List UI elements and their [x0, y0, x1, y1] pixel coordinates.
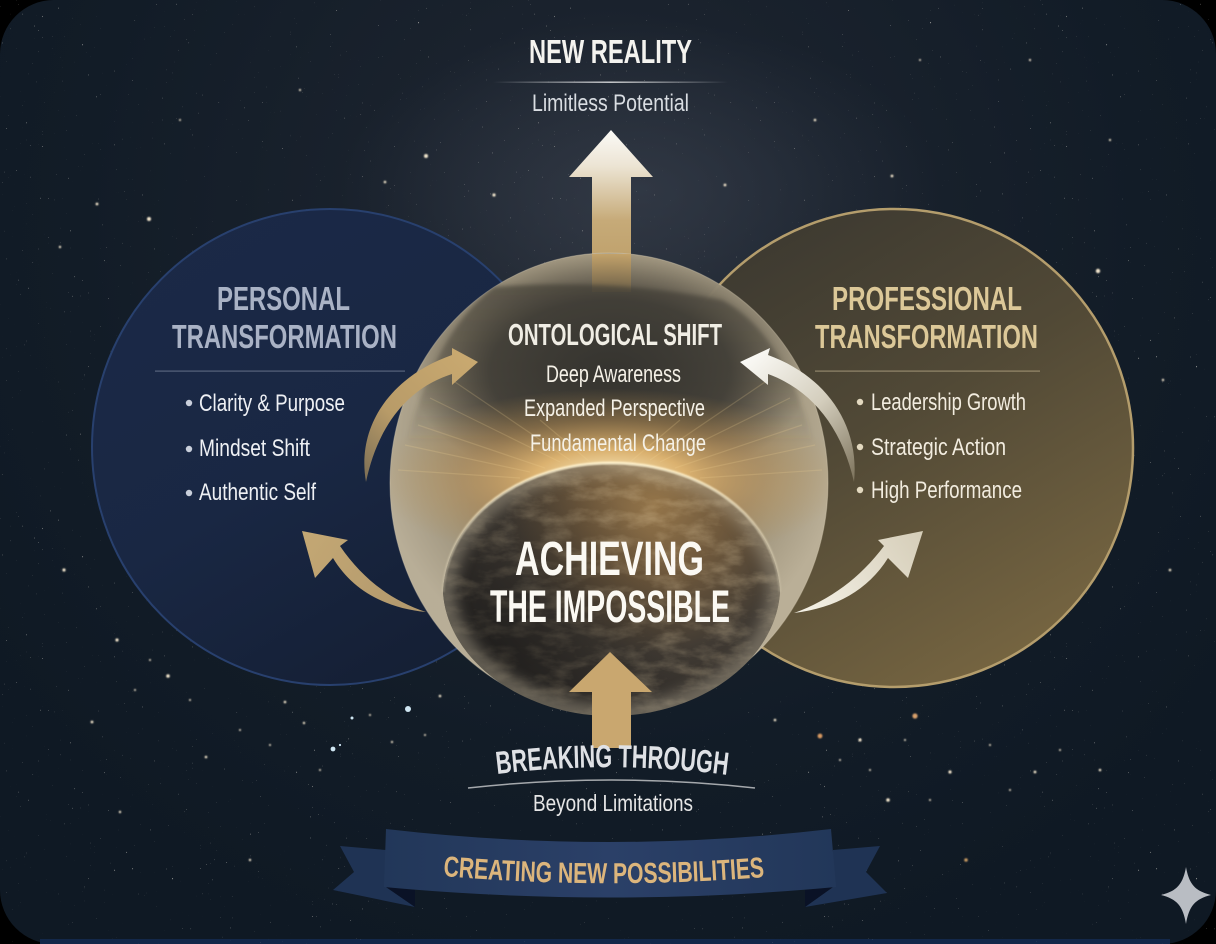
- banner: creating new possibilities: CREATING NEW POSSIBILITIES: [444, 856, 764, 884]
- title: achieving the impossible: [490, 533, 730, 632]
- panel: professional transformation circle: [655, 209, 1133, 687]
- sphere inner shading and glow: [398, 256, 822, 528]
- heading: personal transformation: TRANSFORMATION: [172, 318, 397, 355]
- icon: sparkle watermark: [1161, 867, 1211, 924]
- list: personal bullet points: [186, 390, 345, 506]
- list: professional bullet points: [857, 389, 1026, 504]
- heading: breaking through: BREAKING THROUGH: [496, 744, 729, 775]
- circle: professional: [655, 209, 1133, 687]
- heading: breaking through: [468, 744, 756, 816]
- list: professional bullet points: Leadership Growth: [871, 389, 1026, 416]
- circle: personal: [92, 209, 568, 685]
- list: professional bullet points: High Performance: [871, 477, 1022, 504]
- title: ontological shift: ONTOLOGICAL SHIFT: [508, 317, 722, 352]
- list: ontological shift points: Fundamental Change: [530, 430, 706, 457]
- list: personal bullet points: Authentic Self: [199, 479, 316, 506]
- heading: personal transformation: [172, 280, 397, 355]
- list: professional bullet points: Strategic Action: [871, 434, 1006, 461]
- arrow: new reality upward: [569, 130, 653, 294]
- list: personal bullet points: Mindset Shift: [199, 435, 310, 462]
- heading: professional transformation: TRANSFORMATION: [815, 318, 1038, 355]
- title: achieving the impossible: THE IMPOSSIBLE: [490, 581, 730, 632]
- arrow: lower left curved gold: [302, 531, 426, 612]
- arrow: lower right curved white: [794, 531, 923, 613]
- list: ontological shift points: [524, 361, 706, 457]
- heading: new reality: NEW REALITY: [529, 33, 692, 70]
- arrow: upper right curved white: [740, 348, 855, 482]
- heading: professional transformation: [815, 280, 1038, 355]
- subtitle: beyond limitations: Beyond Limitations: [533, 790, 693, 816]
- arrow: breaking through upward: [569, 652, 652, 748]
- subtitle: limitless potential: Limitless Potential: [532, 90, 689, 117]
- heading: professional transformation: PROFESSIONAL: [832, 280, 1022, 317]
- list: ontological shift points: Expanded Perspective: [524, 395, 705, 422]
- arrow shaft seen through sphere: [592, 254, 631, 292]
- sphere body: [390, 253, 828, 713]
- heading: new reality: [493, 33, 728, 117]
- title: achieving the impossible: ACHIEVING: [515, 533, 704, 586]
- arrow: upper left curved gold: [364, 348, 478, 482]
- list: personal bullet points: Clarity & Purpose: [199, 390, 345, 417]
- planet: achieving the impossible: [442, 461, 780, 716]
- list: ontological shift points: Deep Awareness: [546, 361, 681, 388]
- banner: creating new possibilities: [333, 829, 887, 907]
- panel: ontological shift sphere: [390, 252, 828, 686]
- panel: personal transformation circle: [92, 209, 568, 685]
- heading: personal transformation: PERSONAL: [217, 280, 350, 317]
